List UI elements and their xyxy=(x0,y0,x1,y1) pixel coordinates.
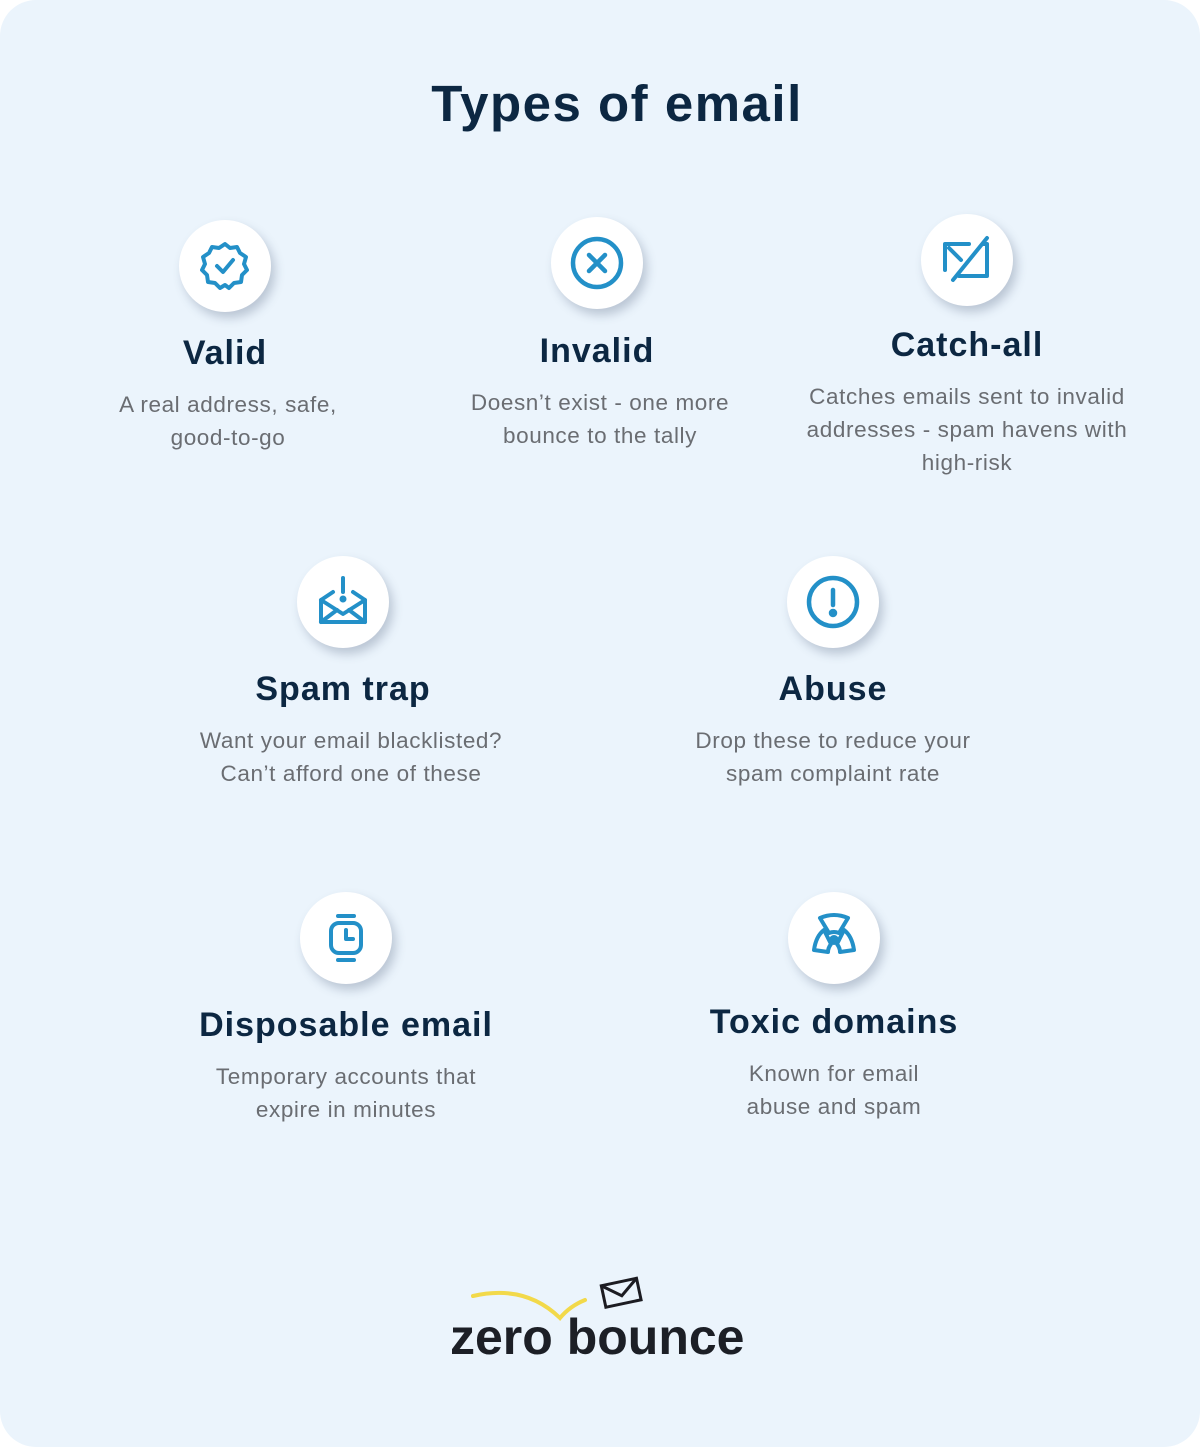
text: catch-all desc xyxy=(807,384,1127,475)
text: catch-all desc: Catches emails sent to invalid xyxy=(809,384,1125,409)
heading: Valid: Valid xyxy=(183,334,267,372)
text: invalid desc: bounce to the tally xyxy=(503,423,697,448)
text: toxic desc: Known for email xyxy=(749,1061,919,1086)
icon: crossed envelope xyxy=(921,214,1013,306)
text: valid desc: good-to-go xyxy=(171,425,285,450)
icon: exclamation xyxy=(787,556,879,648)
text: spam trap desc: Can’t afford one of these xyxy=(220,761,482,786)
text: toxic desc xyxy=(747,1061,921,1119)
icon: spam trap envelope xyxy=(297,556,389,648)
text: disposable desc xyxy=(216,1064,476,1122)
text: spam trap desc xyxy=(200,728,502,786)
text: spam trap desc: Want your email blacklisted? xyxy=(200,728,502,753)
title: Types of email xyxy=(431,75,803,132)
heading: Disposable email: Disposable email xyxy=(199,1006,493,1044)
logo: zero bounce: zero bounce xyxy=(450,1309,744,1365)
heading: Catch-all: Catch-all xyxy=(891,326,1043,364)
text: valid desc xyxy=(119,392,337,450)
text: invalid desc: Doesn’t exist - one more xyxy=(471,390,729,415)
text: valid desc: A real address, safe, xyxy=(119,392,337,417)
heading: Invalid: Invalid xyxy=(540,332,654,370)
text: invalid desc xyxy=(471,390,729,448)
text: abuse desc: spam complaint rate xyxy=(726,761,940,786)
heading: Spam trap: Spam trap xyxy=(255,670,431,708)
text: abuse desc: Drop these to reduce your xyxy=(695,728,971,753)
icon: radiation xyxy=(788,892,880,984)
item: valid xyxy=(178,220,280,323)
icon: watch xyxy=(300,892,392,984)
text: toxic desc: abuse and spam xyxy=(747,1094,921,1119)
heading: Toxic domains: Toxic domains xyxy=(710,1003,958,1041)
logo: zero bounce xyxy=(450,1276,744,1365)
heading: Abuse: Abuse xyxy=(779,670,887,708)
text: abuse desc xyxy=(695,728,971,786)
text: disposable desc: Temporary accounts that xyxy=(216,1064,476,1089)
icon: badge check xyxy=(179,220,271,312)
text: catch-all desc: addresses - spam havens with xyxy=(807,417,1127,442)
text: catch-all desc: high-risk xyxy=(922,450,1012,475)
icon: x circle xyxy=(551,217,643,309)
text: disposable desc: expire in minutes xyxy=(256,1097,436,1122)
